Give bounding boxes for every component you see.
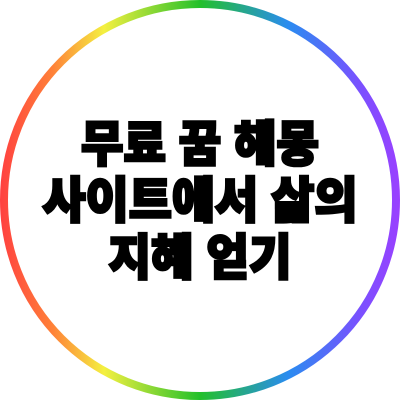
title line 2: 사이트에서 삶의 <box>42 174 358 228</box>
title line 3: 지혜 얻기 <box>108 232 292 286</box>
title line 1: 무료 꿈 해몽 <box>81 118 319 172</box>
